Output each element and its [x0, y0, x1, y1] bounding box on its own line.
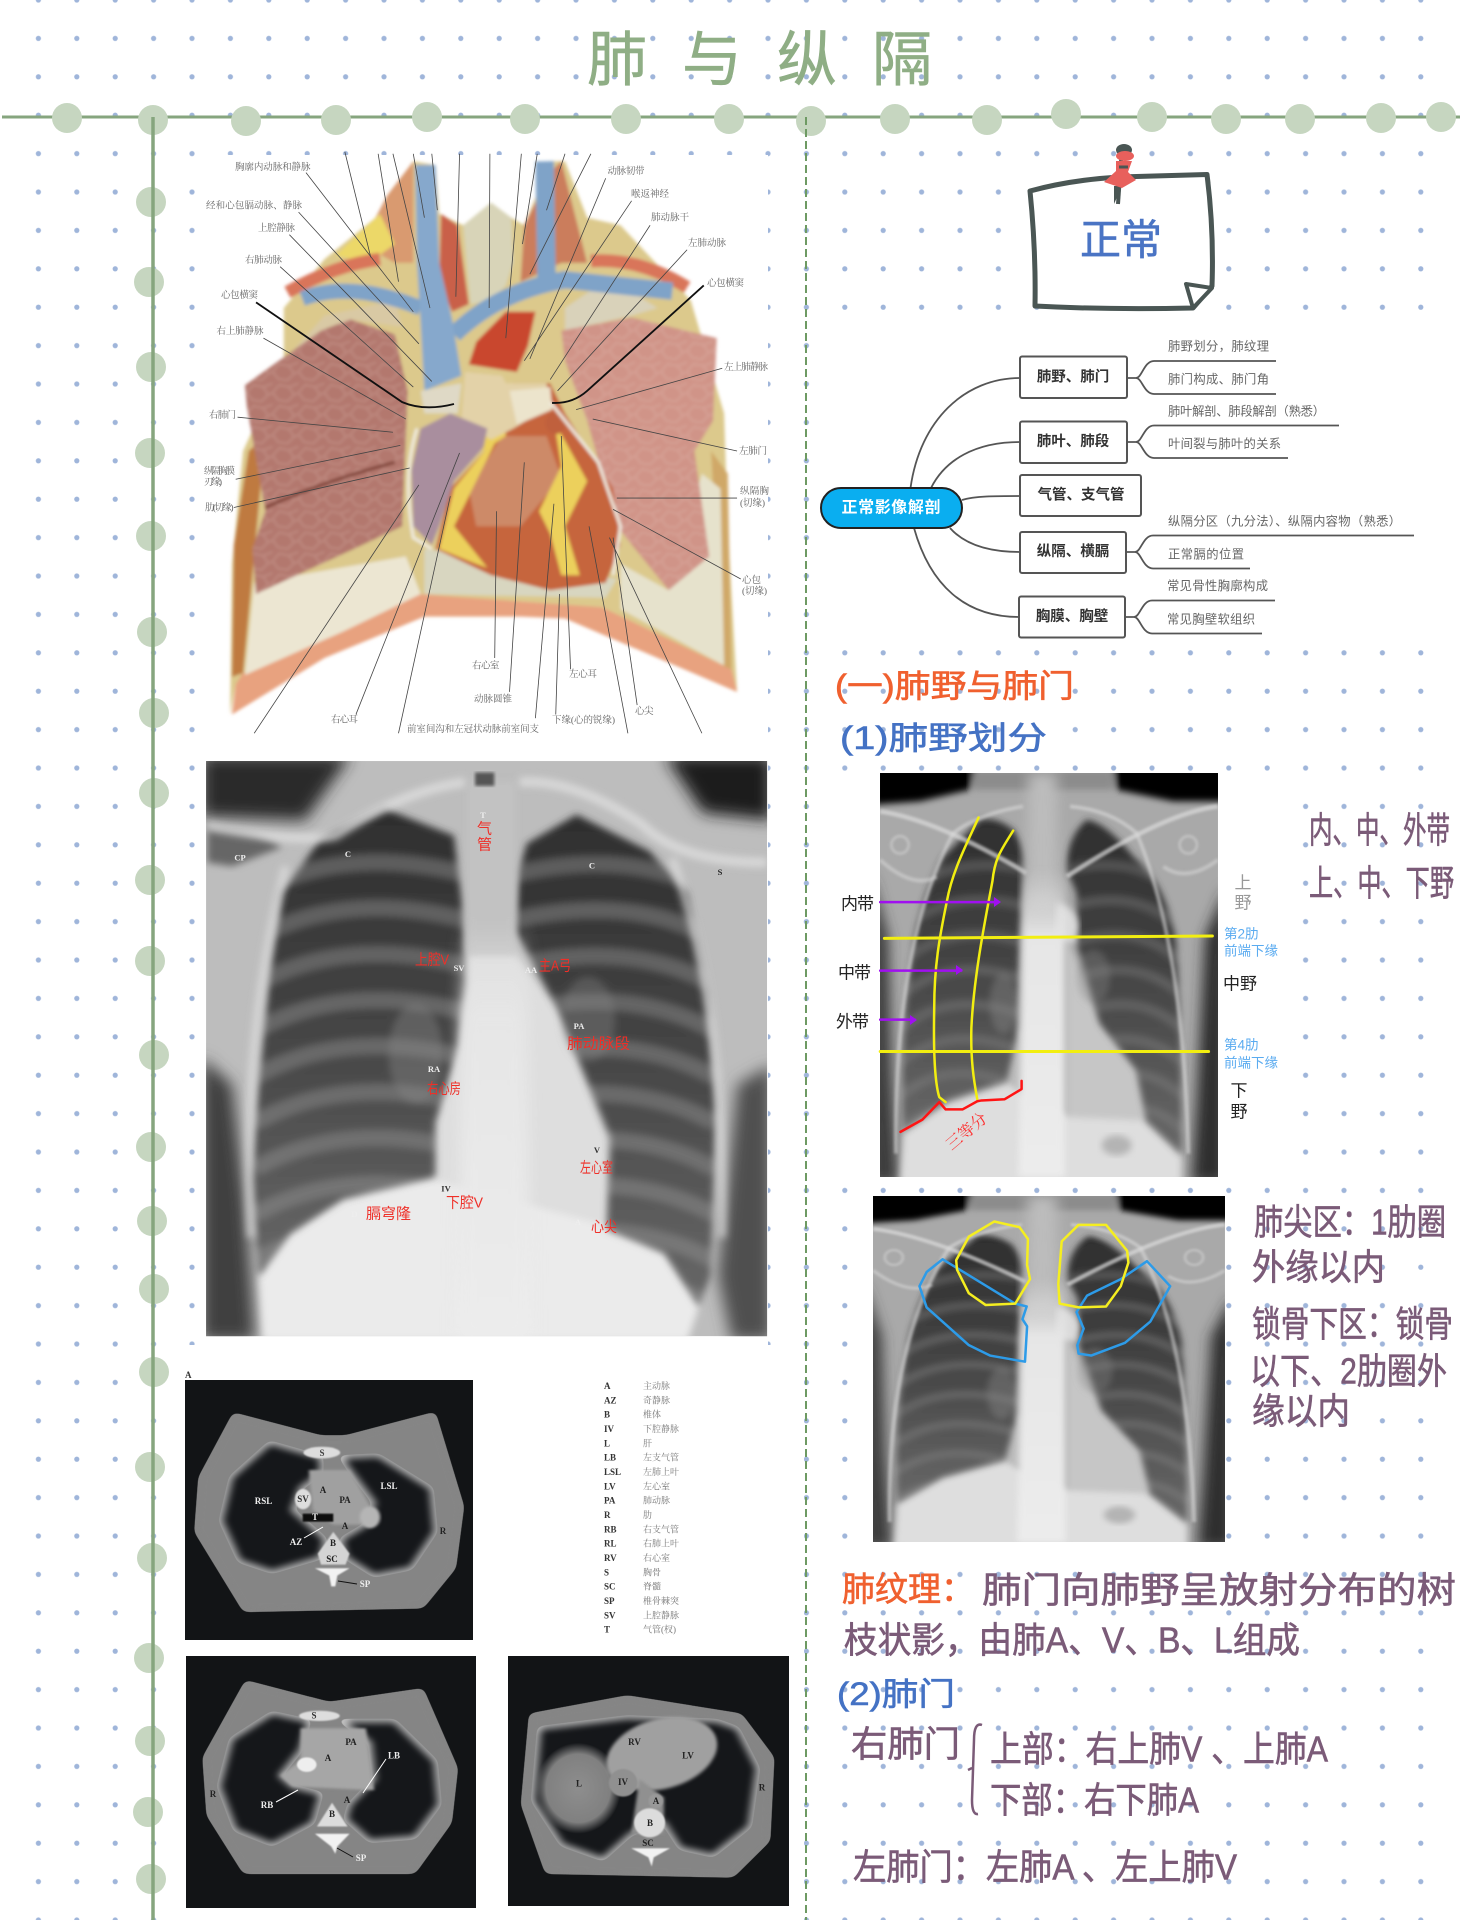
CT legend: AZ: [604, 1395, 617, 1405]
red handwritten x-ray notes: 气: [477, 820, 492, 838]
CT legend: B: [604, 1410, 610, 1420]
illustration labels: 右上肺静脉: [216, 325, 264, 337]
connector branches: [910, 361, 1414, 634]
illustration labels: 纵隔胸: [740, 485, 769, 497]
CT legend: 下腔静脉: [643, 1423, 679, 1434]
illustration labels: 肋(切缘): [205, 502, 234, 514]
x-ray letter labels: SV: [454, 963, 465, 973]
illustration labels: 动脉圆锥: [474, 693, 512, 705]
illustration labels: 右心室: [472, 660, 500, 672]
x-ray letter labels: IV: [441, 1184, 452, 1194]
CT legend: T: [604, 1625, 610, 1635]
lung markings text: [842, 1570, 1456, 1660]
right atrium: [411, 413, 487, 545]
leaf labels: 常见骨性胸廓构成: [1167, 578, 1268, 593]
CT legend: [604, 1380, 679, 1635]
CT A labels: LSL: [380, 1481, 398, 1491]
illustration labels: 右肺门: [209, 409, 236, 421]
CT C labels: A: [653, 1796, 660, 1806]
illustration labels: (切缘): [740, 497, 765, 509]
CT legend: LB: [604, 1453, 616, 1463]
CT C labels: RV: [628, 1737, 641, 1747]
x-ray letter labels: AA: [525, 965, 538, 975]
pleural panels: [245, 556, 421, 675]
red handwritten x-ray notes: 下腔V: [446, 1194, 483, 1212]
CT legend: LV: [604, 1481, 616, 1491]
illustration labels: 心包: [742, 574, 761, 586]
CT B labels: PA: [345, 1737, 357, 1747]
icon: push pin: [1104, 144, 1136, 204]
x-ray: lung zones and fields: [836, 766, 1278, 1184]
CT C labels: R: [759, 1782, 766, 1792]
CT A labels: SC: [326, 1554, 338, 1564]
red handwritten x-ray notes: 心尖: [591, 1218, 617, 1236]
illustration labels: 左心耳: [569, 668, 597, 680]
pinned note: 正常: 正常: [1080, 216, 1162, 264]
zone overlay lines: [880, 818, 1212, 1132]
CT B labels: A: [325, 1753, 332, 1763]
leaf labels: 肺野划分，肺纹理: [1168, 340, 1269, 354]
chest wall: [230, 161, 737, 714]
red handwritten x-ray notes: 主A弓: [539, 958, 571, 974]
node: 气管、支气管: 气管、支气管: [1038, 486, 1124, 504]
CT C labels: [576, 1737, 766, 1848]
CT C labels: SC: [642, 1838, 654, 1848]
CT B labels: R: [210, 1789, 217, 1799]
CT legend: 气管(杈): [643, 1624, 676, 1635]
CT legend: RV: [604, 1553, 617, 1563]
CT legend: 右支气管: [643, 1523, 679, 1534]
leaf labels: 叶间裂与肺叶的关系: [1168, 436, 1281, 451]
illustration labels: 下缘(心的锐缘): [552, 714, 615, 726]
x-ray letter labels: T: [480, 810, 486, 820]
CT legend: RB: [604, 1524, 617, 1534]
CT legend: 肝: [643, 1438, 652, 1448]
illustration labels: 肺动脉干: [651, 212, 689, 224]
CT legend: 上腔静脉: [643, 1609, 679, 1620]
node: 肺叶、肺段: [1020, 422, 1127, 463]
CT legend: SV: [604, 1610, 616, 1620]
red handwritten x-ray notes: 右心房: [427, 1080, 461, 1098]
node: 纵隔、横膈: 纵隔、横膈: [1037, 542, 1109, 560]
illustration labels: 动脉韧带: [608, 165, 645, 177]
x-ray letter labels: CP: [234, 852, 246, 862]
hilum notes: [851, 1724, 1328, 1888]
CT B labels: S: [311, 1710, 317, 1720]
red subclavian arteries: [288, 259, 380, 292]
zone and field labels: 外带: [836, 1012, 869, 1032]
hilum notes: 左肺门：左肺A 、左上肺V: [853, 1846, 1237, 1888]
lung markings text: 肺门向肺野呈放射分布的树: [982, 1570, 1456, 1610]
lung markings text: 肺纹理：: [842, 1571, 974, 1609]
CT legend: R: [604, 1510, 611, 1520]
leaf labels: 肺门构成、肺门角: [1168, 372, 1269, 386]
CT A labels: SP: [360, 1579, 371, 1589]
CT legend: RL: [604, 1539, 617, 1549]
red handwritten x-ray notes: 肺动脉段: [567, 1036, 630, 1052]
illustration labels: 左肺动脉: [688, 237, 726, 249]
CT legend: 左支气管: [643, 1452, 679, 1463]
red handwritten x-ray notes: 膈穹隆: [366, 1206, 411, 1222]
leaf labels: 肺叶解剖、肺段解剖（熟悉）: [1168, 404, 1325, 418]
node: 胸膜、胸壁: [1019, 596, 1125, 638]
pulmonary trunk: [469, 312, 535, 372]
CT legend: 右心室: [643, 1552, 670, 1563]
illustration labels: 心包横窦: [707, 277, 744, 289]
illustration labels: 胸廓内动脉和静脉: [235, 161, 311, 173]
CT legend: IV: [604, 1424, 615, 1434]
CT legend: 左心室: [643, 1480, 670, 1491]
leaf labels: 常见胸壁软组织: [1167, 612, 1255, 626]
x-ray letter labels: RA: [428, 1064, 441, 1074]
illustration labels: 纵隔胸膜: [204, 465, 235, 477]
aorta and conus: [461, 372, 550, 440]
CT A labels: RSL: [255, 1496, 272, 1506]
CT C labels: B: [647, 1818, 653, 1828]
root node: 正常影像解剖: [842, 498, 940, 516]
mind map: normal imaging anatomy: [821, 340, 1414, 638]
illustration labels: 刃缘): [204, 476, 222, 488]
upper mediastinum muscle: [362, 161, 413, 263]
illustration labels: 心包横窦: [221, 289, 258, 301]
illustration labels: 左上肺静脉: [724, 361, 768, 373]
CT panel C: [508, 1656, 789, 1906]
illustration labels: 上腔静脉: [258, 222, 295, 234]
x-ray letter labels: A: [575, 1217, 582, 1227]
node: 胸膜、胸壁: 胸膜、胸壁: [1036, 607, 1108, 625]
CT legend: 肺动脉: [643, 1495, 670, 1506]
CT C labels: L: [576, 1778, 582, 1788]
CT legend: SP: [604, 1596, 615, 1606]
illustration labels: 喉返神经: [631, 188, 669, 200]
x-ray letter labels: S: [718, 867, 723, 877]
node: 纵隔、横膈: [1020, 532, 1126, 573]
trachea: [463, 203, 513, 304]
heading: (1)肺野划分: (1)肺野划分: [840, 720, 1047, 756]
illustration labels: 前室间沟和左冠状动脉前室间支: [407, 723, 539, 735]
red handwritten x-ray notes: 管: [477, 836, 492, 854]
node: 气管、支气管: [1020, 475, 1141, 516]
pinned note: 正常: [1030, 144, 1212, 309]
CT legend: SC: [604, 1582, 616, 1592]
CT panel A: A: [185, 1370, 192, 1380]
red handwritten x-ray notes: 左心室: [580, 1160, 613, 1176]
CT A labels: B: [330, 1538, 336, 1548]
hilum notes: 右肺门: [851, 1724, 960, 1764]
CT legend: 主动脉: [643, 1380, 670, 1391]
CT legend: 椎体: [643, 1409, 661, 1420]
CT B labels: A: [344, 1795, 351, 1805]
leaf labels: [1167, 340, 1401, 626]
zone and field labels: 中带: [838, 964, 871, 982]
CT panel B: [186, 1656, 476, 1908]
node: 肺叶、肺段: 肺叶、肺段: [1037, 432, 1110, 450]
leaf labels: 正常膈的位置: [1168, 546, 1244, 562]
illustration labels: 右心耳: [331, 714, 358, 726]
CT legend: LSL: [604, 1467, 621, 1477]
CT legend: S: [604, 1567, 609, 1577]
node: 肺野、肺门: [1020, 356, 1127, 398]
anatomical illustration: heart and lungs: [204, 152, 769, 735]
CT A labels: SV: [297, 1494, 309, 1504]
illustration labels: 经和心包膈动脉、静脉: [206, 200, 302, 212]
handwritten note: zones and fields: [1309, 810, 1454, 904]
chest x-ray annotated: [201, 755, 772, 1341]
CT A labels: A: [342, 1521, 349, 1531]
x-ray letter labels: D: [351, 1209, 358, 1219]
zone and field labels: 第4肋: [1224, 1036, 1259, 1052]
x-ray letter labels: C: [345, 849, 351, 859]
root node: [821, 488, 962, 528]
CT legend: 肋: [643, 1509, 652, 1520]
zone and field labels: 野: [1230, 1102, 1248, 1122]
zone and field labels: 上: [1234, 874, 1252, 892]
heading: (2)肺门: (2)肺门: [837, 1676, 955, 1712]
CT legend: A: [604, 1381, 611, 1391]
CT legend: 奇静脉: [643, 1394, 670, 1405]
CT legend: 胸骨: [643, 1567, 661, 1577]
title: 肺 与 纵 隔: [587, 26, 932, 94]
CT A labels: R: [440, 1526, 447, 1536]
zone and field labels: 中野: [1223, 974, 1257, 994]
node: 肺野、肺门: 肺野、肺门: [1037, 368, 1109, 386]
CT legend: 椎骨棘突: [643, 1595, 679, 1606]
illustration labels: 右肺动脉: [245, 254, 282, 266]
great veins: [302, 291, 421, 308]
zone and field labels: 内带: [841, 894, 874, 914]
CT legend: 右肺上叶: [643, 1538, 679, 1549]
x-ray letter labels: PA: [574, 1021, 585, 1031]
red handwritten x-ray notes: 上腔V: [415, 952, 449, 968]
x-ray letter labels: [234, 810, 723, 1227]
x-ray letter labels: C: [589, 860, 595, 870]
illustration labels: [204, 161, 769, 735]
handwritten note: apical and subclavicular definition: [1250, 1202, 1453, 1432]
handwritten note: apical and subclavicular definition: 缘以内: [1252, 1390, 1350, 1432]
CT legend: PA: [604, 1496, 616, 1506]
CT B labels: [210, 1710, 400, 1863]
CT panel A: [185, 1370, 473, 1640]
hilum notes: 上部：右上肺V 、上肺A: [990, 1728, 1328, 1770]
zone and field labels: 前端下缘: [1224, 942, 1278, 958]
zone and field labels: 下: [1230, 1082, 1248, 1100]
leader lines: [234, 152, 741, 733]
zone and field labels: 野: [1234, 894, 1252, 912]
lung markings text: 枝状影，由肺A、V、B、L组成: [844, 1620, 1300, 1660]
CT C labels: IV: [618, 1777, 628, 1787]
CT A labels: S: [319, 1448, 325, 1458]
red handwritten x-ray notes: [366, 820, 630, 1236]
CT legend: L: [604, 1438, 610, 1448]
x-ray letter labels: V: [594, 1145, 601, 1155]
illustration labels: (切缘): [742, 585, 767, 597]
illustration labels: 左肺门: [739, 445, 767, 457]
CT A labels: [255, 1448, 447, 1589]
heading: (一)肺野与肺门: (一)肺野与肺门: [835, 668, 1074, 704]
CT legend: 脊髓: [643, 1581, 661, 1592]
CT A labels: A: [320, 1485, 327, 1495]
label: 三等分: 三等分: [943, 1109, 991, 1154]
hilum notes: 下部：右下肺A: [990, 1780, 1199, 1820]
CT A labels: T: [312, 1512, 318, 1522]
CT B labels: B: [329, 1809, 335, 1819]
handwritten note: apical and subclavicular definition: 外缘以内: [1252, 1246, 1385, 1288]
heart: [436, 383, 620, 590]
CT B labels: RB: [261, 1800, 273, 1810]
CT legend: 左肺上叶: [643, 1466, 679, 1477]
illustration labels: 心尖: [635, 705, 654, 717]
zone and field labels: 第2肋: [1224, 926, 1259, 942]
CT B labels: SP: [356, 1853, 367, 1863]
CT A labels: PA: [339, 1495, 351, 1505]
CT A labels: AZ: [290, 1537, 302, 1547]
CT B labels: LB: [388, 1750, 400, 1760]
CT C labels: LV: [682, 1750, 694, 1760]
zone and field labels: [836, 874, 1278, 1122]
zone and field labels: 前端下缘: [1224, 1054, 1278, 1070]
lungs: [245, 319, 408, 594]
leaf labels: 纵隔分区（九分法）、纵隔内容物（熟悉）: [1168, 514, 1401, 528]
x-ray: apical and subclavicular regions: [863, 1190, 1234, 1548]
arrowheads: [910, 897, 1001, 1025]
